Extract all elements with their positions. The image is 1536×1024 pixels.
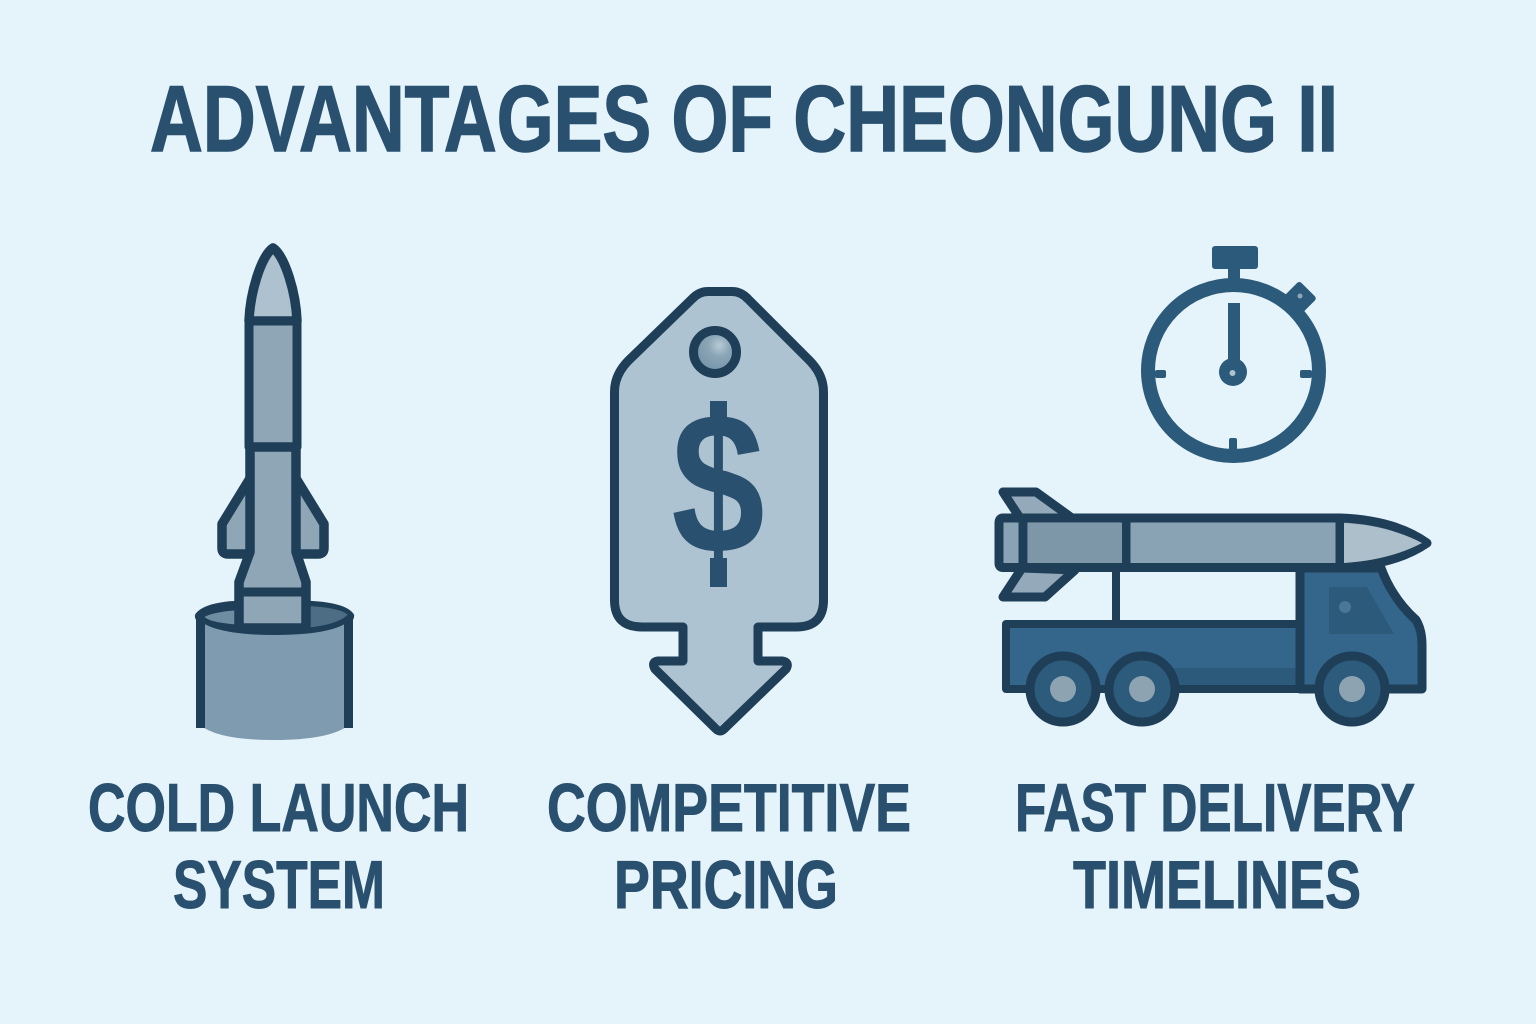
wheels — [1030, 656, 1096, 722]
canister interior — [199, 605, 350, 630]
missile fins — [1003, 492, 1072, 518]
missile rear segment — [1028, 523, 1122, 563]
label: competitive pricing: PRICING — [614, 847, 838, 923]
label: fast delivery timelines — [1015, 770, 1415, 923]
missile lower body — [239, 447, 306, 628]
missile nose — [249, 248, 297, 321]
icon: dollar sign: $ — [671, 372, 765, 596]
icon: stopwatch — [1148, 246, 1319, 456]
label: cold launch system — [88, 770, 469, 923]
truck bed — [1006, 624, 1300, 689]
icon: missile in launch canister — [197, 248, 352, 740]
missile upper body — [249, 321, 297, 447]
label: competitive pricing: COMPETITIVE — [547, 770, 911, 846]
label: cold launch system: SYSTEM — [173, 847, 385, 923]
truck cab — [1300, 568, 1422, 689]
cab window — [1329, 587, 1394, 634]
icon: price tag with dollar and down arrow — [614, 292, 824, 731]
canister body — [200, 616, 349, 740]
missile nose — [1344, 523, 1422, 563]
missile fins — [222, 480, 324, 554]
tag hole — [694, 330, 736, 374]
label: cold launch system: COLD LAUNCH — [88, 770, 469, 846]
icon: missile transporter truck — [999, 492, 1427, 722]
label: fast delivery timelines: TIMELINES — [1073, 847, 1361, 923]
missile body — [999, 518, 1427, 568]
truck struts — [1112, 568, 1120, 624]
label: competitive pricing — [547, 770, 911, 923]
label: fast delivery timelines: FAST DELIVERY — [1015, 770, 1415, 846]
